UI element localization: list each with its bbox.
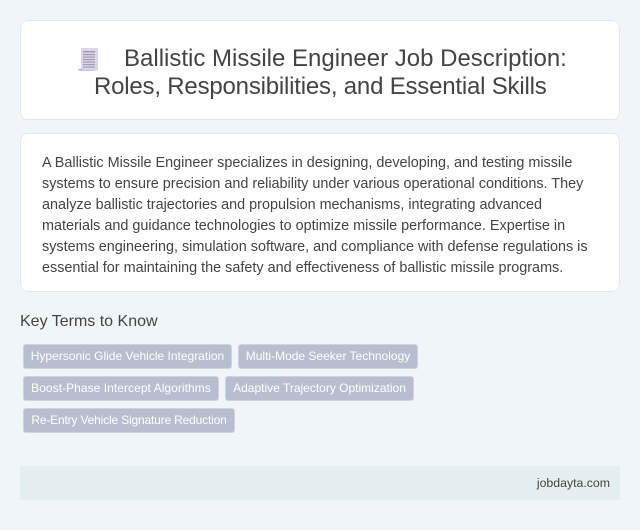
title line 1: Ballistic Missile Engineer Job Description: (124, 45, 567, 72)
tag: re-entry (23, 408, 235, 433)
description text: systems engineering, simulation software, and compliance with defense regulations is (42, 239, 588, 255)
tag: boost-phase (23, 376, 219, 401)
description text (42, 155, 588, 276)
tag: adaptive trajectory (225, 376, 414, 401)
tag: multi-mode seeker (238, 344, 418, 369)
panel: description card (20, 133, 620, 292)
heading: key terms: Key Terms to Know (20, 313, 158, 330)
tag: boost-phase: Boost-Phase Intercept Algorithms (31, 381, 211, 395)
description text: materials and guidance technologies to optimize missile performance. Expertise in (42, 218, 565, 234)
panel: title card (20, 20, 620, 120)
title line 2: Roles, Responsibilities, and Essential Skills (94, 73, 547, 100)
tag: adaptive trajectory: Adaptive Trajectory Optimization (233, 381, 406, 395)
footer source text: jobdayta.com (537, 476, 610, 490)
description text: essential for maintaining the safety and effectiveness of ballistic missile programs. (42, 260, 563, 276)
icon: document scroll (78, 48, 98, 71)
description text: systems to ensure precision and reliability under various operational conditions. They (42, 176, 583, 192)
tag: hypersonic glide (23, 344, 232, 369)
tag: hypersonic glide: Hypersonic Glide Vehicle Integration (31, 349, 224, 363)
description text: A Ballistic Missile Engineer specializes in designing, developing, and testing missile (42, 155, 572, 171)
description text: analyze ballistic trajectories and propulsion mechanisms, integrating advanced (42, 197, 542, 213)
footer bar (20, 466, 620, 500)
tag: re-entry: Re-Entry Vehicle Signature Reduction (31, 413, 227, 427)
tag: multi-mode seeker: Multi-Mode Seeker Technology (246, 349, 410, 363)
